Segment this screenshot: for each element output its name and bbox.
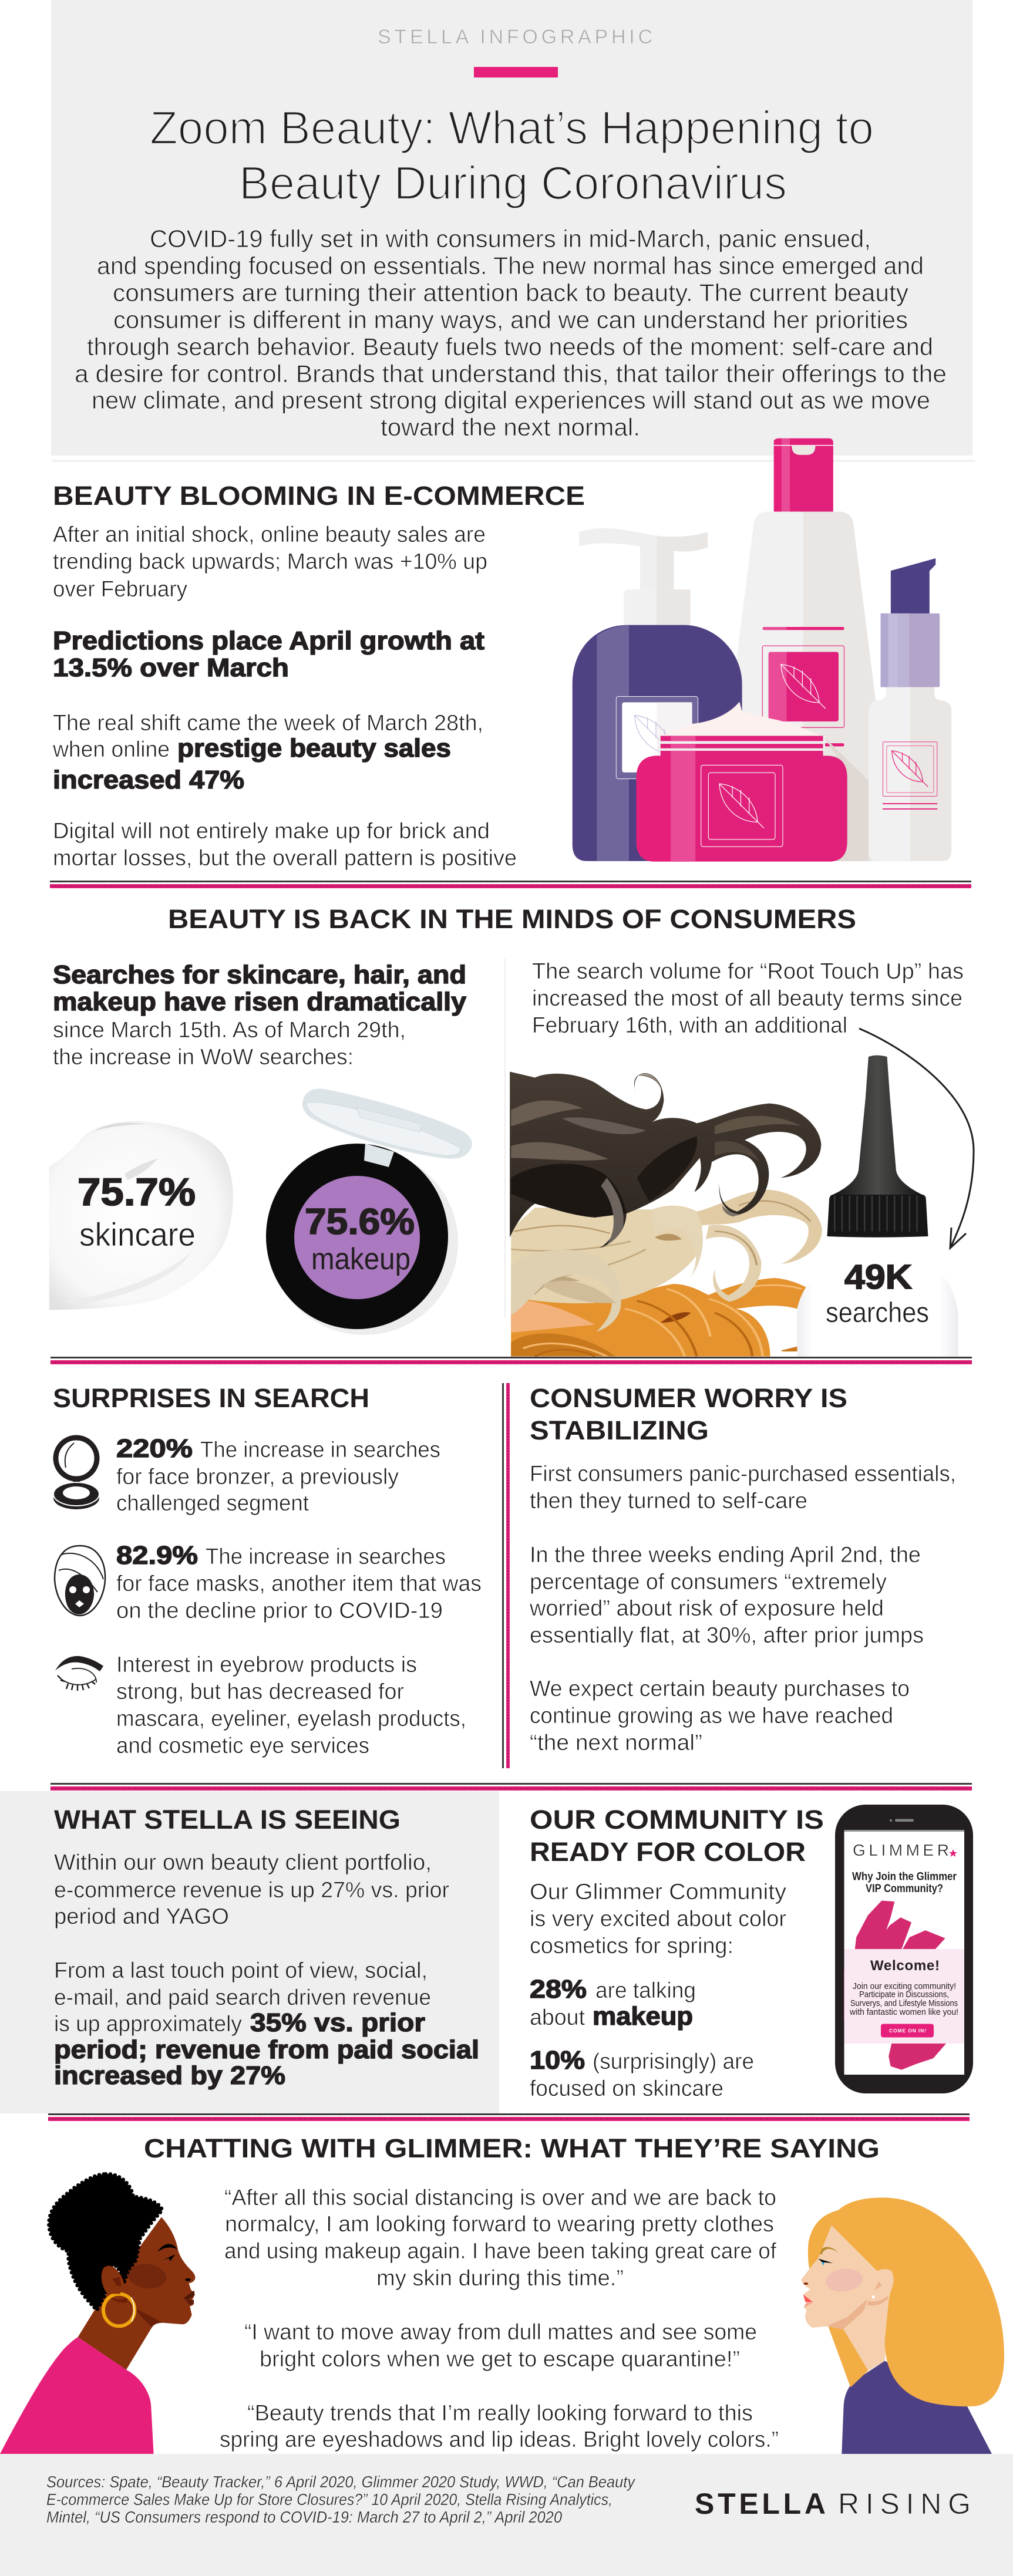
intro paragraph: consumers are turning their attention back to beauty. The current beauty xyxy=(113,279,908,306)
illustration: woman with dark hair xyxy=(0,2174,195,2454)
heading: READY FOR COLOR xyxy=(530,1837,806,1867)
text block: Digital will not entirely make up for brick and xyxy=(53,819,490,844)
text block xyxy=(530,1880,786,2101)
left text block: since March 15th. As of March 29th, xyxy=(53,1018,406,1043)
welcome card: Join our exciting community! xyxy=(853,1981,956,1991)
text block: Predictions place April growth at xyxy=(53,626,484,655)
text block xyxy=(54,1850,479,2090)
icon: face mask and towel xyxy=(55,1546,105,1616)
text block: In the three weeks ending April 2nd, the xyxy=(530,1543,921,1567)
left text block: the increase in WoW searches: xyxy=(53,1045,354,1070)
panel: what stella is seeing xyxy=(0,1791,499,2113)
stat: face bronzer: 220% xyxy=(116,1434,193,1463)
heading: WHAT STELLA IS SEEING xyxy=(54,1805,401,1835)
text block xyxy=(529,1462,956,1755)
illustration: cosmetic bottles xyxy=(573,439,951,862)
phone heading: VIP Community? xyxy=(866,1883,943,1895)
root touch-up bottle: 49K xyxy=(844,1258,912,1296)
welcome card: COME ON IN! xyxy=(889,2028,926,2034)
pink cream jar xyxy=(637,702,847,862)
stat: eyebrow products: Interest in eyebrow products is xyxy=(116,1653,417,1677)
text block: are talking xyxy=(595,1978,696,2003)
intro paragraph: COVID-19 fully set in with consumers in mid-March, panic ensued, xyxy=(150,225,871,252)
sources: Mintel, “US Consumers respond to COVID-19: March 27 to April 2,” April 2020 xyxy=(46,2508,562,2526)
text block: trending back upwards; March was +10% up xyxy=(53,549,487,574)
intro paragraph: consumer is different in many ways, and we can understand her priorities xyxy=(113,306,908,333)
heading: CONSUMER WORRY IS xyxy=(530,1383,847,1413)
left text block: makeup have risen dramatically xyxy=(53,987,467,1016)
stat: eyebrow products: strong, but has decreased for xyxy=(116,1680,404,1704)
text block: Within our own beauty client portfolio, xyxy=(54,1850,432,1875)
right text block: February 16th, with an additional xyxy=(532,1013,847,1038)
quotes: “I want to move away from dull mattes and see some xyxy=(244,2320,757,2345)
right text block: increased the most of all beauty terms since xyxy=(532,986,962,1011)
text block: mortar losses, but the overall pattern is positive xyxy=(53,846,517,871)
text block: e-mail, and paid search driven revenue xyxy=(54,1985,431,2010)
stat: eyebrow products: and cosmetic eye services xyxy=(116,1734,369,1758)
dark hair xyxy=(510,1071,821,1248)
logo: Glimmer: GLIMMER xyxy=(853,1841,949,1859)
makeup eyeshadow compact: makeup xyxy=(311,1242,410,1276)
heading: SURPRISES IN SEARCH xyxy=(53,1383,369,1413)
stat: face bronzer xyxy=(116,1434,440,1516)
quotes: my skin during this time.” xyxy=(376,2266,624,2291)
blonde hair xyxy=(511,1190,822,1331)
heading: BEAUTY IS BACK IN THE MINDS OF CONSUMERS xyxy=(168,904,856,934)
quotes: “Beauty trends that I’m really looking forward to this xyxy=(247,2401,753,2426)
skincare cream swatch: 75.7% xyxy=(78,1170,196,1213)
stat: eyebrow products xyxy=(116,1653,466,1758)
quotes: spring are eyeshadows and lip ideas. Bright lovely colors.” xyxy=(220,2427,779,2452)
quotes xyxy=(220,2186,779,2452)
welcome card: Welcome! xyxy=(870,1958,940,1974)
skincare cream swatch xyxy=(49,1121,233,1310)
panel: consumer worry is stabilizing xyxy=(529,1383,956,1755)
text block: is very excited about color xyxy=(530,1907,786,1931)
stat: face bronzer: for face bronzer, a previously xyxy=(116,1465,399,1489)
text block: 28% xyxy=(530,1975,587,2004)
sources: Sources: Spate, “Beauty Tracker,” 6 April 2020, Glimmer 2020 Study, WWD, “Can Beauty xyxy=(46,2473,636,2491)
stat: face masks: for face masks, another item that was xyxy=(116,1572,482,1596)
stat: face masks: on the decline prior to COVID-19 xyxy=(116,1599,443,1623)
panel: footer xyxy=(0,2454,1013,2576)
text block: period and YAGO xyxy=(54,1904,229,1929)
quotes: normalcy, I am looking forward to wearing pretty clothes xyxy=(225,2212,774,2237)
text block: e-commerce revenue is up 27% vs. prior xyxy=(54,1878,449,1903)
text block: over February xyxy=(53,577,187,602)
illustration: hair colors xyxy=(510,1071,822,1357)
left text block: Searches for skincare, hair, and xyxy=(53,960,466,989)
text block: about xyxy=(530,2005,585,2030)
text block: 10% xyxy=(530,2046,585,2075)
text block: First consumers panic-purchased essentials, xyxy=(530,1462,956,1486)
text block: Our Glimmer Community xyxy=(530,1880,786,1904)
arrow: additional searches to bottle xyxy=(859,1029,974,1248)
text block: when online xyxy=(52,737,170,762)
eyebrow label: STELLA INFOGRAPHIC xyxy=(378,26,652,48)
intro paragraph: and spending focused on essentials. The new normal has since emerged and xyxy=(97,252,924,279)
lipstick swatches xyxy=(844,1900,946,2070)
sources: E-commerce Sales Make Up for Store Closures?” 10 April 2020, Stella Rising Analytics, xyxy=(46,2490,612,2508)
icon: eye and eyebrow xyxy=(55,1656,103,1691)
stat: face bronzer: challenged segment xyxy=(116,1491,309,1516)
text block: is up approximately xyxy=(54,2012,242,2036)
welcome card: Participate in Discussions, xyxy=(859,1990,949,2000)
makeup eyeshadow compact: 75.6% xyxy=(305,1202,415,1242)
phone heading xyxy=(852,1870,957,1895)
skincare cream swatch: skincare xyxy=(79,1216,196,1253)
right text block: The search volume for “Root Touch Up” has xyxy=(532,959,964,984)
purple pump bottle xyxy=(573,528,742,861)
makeup eyeshadow compact xyxy=(266,1088,472,1335)
intro paragraph xyxy=(75,225,947,441)
heading: OUR COMMUNITY IS xyxy=(530,1805,824,1835)
text block: percentage of consumers “extremely xyxy=(530,1570,887,1594)
quotes: bright colors when we get to escape quarantine!” xyxy=(260,2347,740,2372)
pink accent bar xyxy=(474,67,558,77)
logo: Stella Rising: STELLA xyxy=(695,2487,826,2520)
intro paragraph: a desire for control. Brands that understand this, that tailor their offerings to the xyxy=(75,360,947,387)
copper hair xyxy=(511,1278,807,1357)
intro paragraph: through search behavior. Beauty fuels two needs of the moment: self-care and xyxy=(87,333,933,360)
stat: eyebrow products: mascara, eyeliner, eyelash products, xyxy=(116,1707,466,1731)
heading xyxy=(530,1383,847,1445)
text block: then they turned to self-care xyxy=(530,1489,807,1513)
panel: header xyxy=(51,0,975,462)
intro paragraph: new climate, and present strong digital experiences will stand out as we move xyxy=(92,386,930,414)
right text block xyxy=(532,959,964,1038)
phone mockup: Glimmer community xyxy=(835,1805,973,2093)
text block: From a last touch point of view, social, xyxy=(54,1958,428,1983)
text block: The real shift came the week of March 28th, xyxy=(53,711,483,736)
text block: worried” about risk of exposure held xyxy=(529,1596,884,1621)
text block: increased by 27% xyxy=(54,2061,285,2090)
text block: After an initial shock, online beauty sales are xyxy=(53,522,486,547)
small dropper bottle xyxy=(869,558,951,861)
left text block xyxy=(53,960,467,1070)
stat: face masks xyxy=(116,1541,482,1623)
text block: “the next normal” xyxy=(530,1731,702,1755)
text block: We expect certain beauty purchases to xyxy=(530,1677,910,1701)
text block: prestige beauty sales xyxy=(177,734,451,763)
panel: beauty is back in the minds of consumers xyxy=(49,904,974,1357)
title: Beauty During Coronavirus xyxy=(239,157,787,209)
text block: makeup xyxy=(593,2002,693,2031)
quotes: “After all this social distancing is over and we are back to xyxy=(224,2186,776,2210)
logo: Stella Rising xyxy=(695,2487,971,2520)
panel: surprises in search xyxy=(53,1383,482,1758)
text block: (surprisingly) are xyxy=(593,2049,754,2074)
text block: period; revenue from paid social xyxy=(54,2035,479,2064)
text block: continue growing as we have reached xyxy=(530,1704,893,1728)
heading: CHATTING WITH GLIMMER: WHAT THEY’RE SAYING xyxy=(144,2133,880,2163)
text block: cosmetics for spring: xyxy=(530,1934,733,1958)
title: Zoom Beauty: What’s Happening to xyxy=(150,102,874,154)
welcome card xyxy=(844,1949,964,2044)
title xyxy=(150,102,874,209)
panel: chatting with glimmer xyxy=(0,2133,1004,2454)
panel: beauty blooming in e-commerce xyxy=(52,439,951,871)
logo: Stella Rising: RISING xyxy=(838,2487,971,2520)
stat: face masks: The increase in searches xyxy=(206,1545,446,1569)
sources xyxy=(46,2473,636,2526)
heading xyxy=(530,1805,824,1867)
stat: face bronzer: The increase in searches xyxy=(200,1438,440,1462)
text block: essentially flat, at 30%, after prior jumps xyxy=(530,1623,924,1648)
heading: BEAUTY BLOOMING IN E-COMMERCE xyxy=(53,481,585,511)
intro paragraph: toward the next normal. xyxy=(381,413,640,441)
root touch-up bottle xyxy=(797,1056,958,1357)
text block: increased 47% xyxy=(53,766,244,794)
tall bottle xyxy=(732,439,877,861)
text block: 35% vs. prior xyxy=(250,2008,425,2037)
text block: focused on skincare xyxy=(530,2076,723,2101)
text block: 13.5% over March xyxy=(53,653,289,682)
stat: face masks: 82.9% xyxy=(116,1541,198,1570)
root touch-up bottle: searches xyxy=(826,1297,929,1329)
phone heading: Why Join the Glimmer xyxy=(852,1870,957,1883)
text block xyxy=(52,522,517,871)
heading: STABILIZING xyxy=(530,1415,709,1445)
illustration: woman with blonde hair xyxy=(801,2197,1004,2454)
panel: our community is ready for color xyxy=(530,1805,973,2101)
quotes: and using makeup again. I have been taking great care of xyxy=(224,2239,776,2264)
icon: compact mirror xyxy=(53,1438,99,1509)
welcome card: with fantastic women like you! xyxy=(849,2007,958,2017)
welcome card: Surverys, and Lifestyle Missions xyxy=(850,1998,958,2008)
